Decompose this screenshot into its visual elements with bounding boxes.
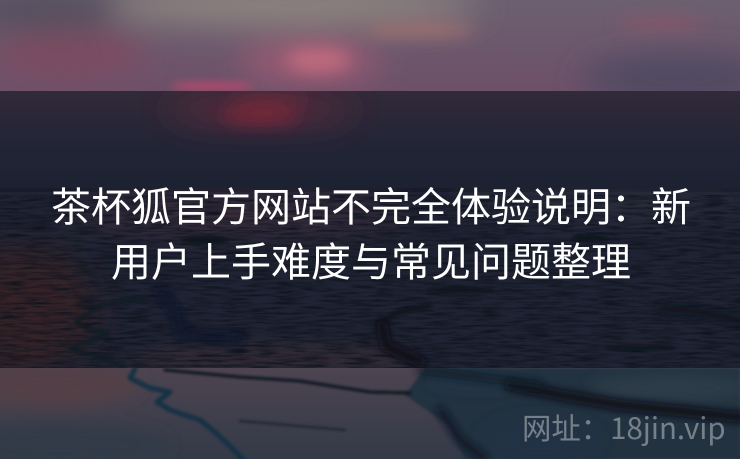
ripple texture bbox=[0, 195, 740, 368]
sky bbox=[0, 0, 740, 100]
lower lighter band bbox=[0, 363, 740, 459]
shore and water bbox=[0, 188, 740, 375]
left sand bbox=[0, 371, 136, 444]
title bbox=[51, 175, 691, 288]
title: 用户上手难度与常见问题整理 bbox=[111, 230, 631, 288]
title: 茶杯狐官方网站不完全体验说明：新 bbox=[51, 175, 691, 233]
watermark: site address: 网址：18jin.vip bbox=[522, 406, 726, 448]
sand strip below wave bbox=[120, 345, 415, 370]
water body lower right bbox=[405, 368, 740, 459]
sea with sunset reflection bbox=[0, 91, 740, 144]
